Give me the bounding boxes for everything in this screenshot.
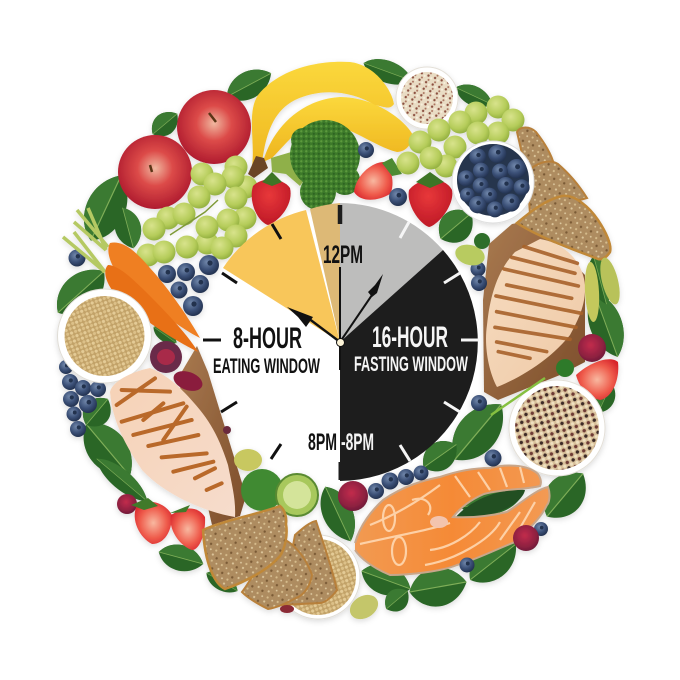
bananas — [248, 62, 413, 178]
strawberries top — [252, 158, 452, 227]
bread slices right — [517, 128, 610, 259]
grain bowl bottom — [276, 535, 360, 619]
label: 12PM: 12PM — [323, 241, 363, 269]
parsley and cucumber — [223, 426, 318, 516]
bread slices bottom — [203, 506, 337, 609]
subheading: fasting window: FASTING WINDOW — [354, 353, 468, 376]
tricolor quinoa bowl — [491, 378, 605, 476]
noon and lower axis lines — [339, 267, 341, 370]
heading: 8-hour: 8-HOUR — [233, 322, 302, 355]
grain bowl left — [58, 289, 152, 383]
grey fasting sector — [340, 203, 443, 342]
cutting board left — [178, 346, 246, 525]
small berries and pickle bottom — [280, 590, 382, 624]
cherry and strawberry right — [576, 334, 618, 400]
tan sector before noon — [310, 203, 340, 342]
green grapes left — [136, 156, 258, 266]
minute hand — [340, 274, 383, 342]
blueberry bowl — [452, 141, 534, 223]
food ring — [46, 53, 633, 624]
heading: 16-hour: 16-HOUR — [372, 321, 448, 354]
quinoa bowl top — [396, 67, 458, 129]
green grapes right — [396, 96, 524, 178]
eating window gold sector — [223, 210, 340, 342]
lime wedge and parsley right — [453, 233, 574, 377]
tick marks — [203, 205, 479, 480]
cutting board right — [483, 220, 585, 400]
clock face — [203, 203, 479, 481]
okra pickles right — [583, 256, 624, 322]
hour hand — [287, 307, 340, 342]
carrots — [63, 208, 200, 352]
spinach leaves — [46, 53, 633, 617]
salmon steak — [355, 466, 550, 575]
label: 8PM: 8PM — [308, 429, 337, 456]
dark fasting sector — [340, 250, 478, 481]
blueberries and cherries around the ring — [59, 142, 548, 618]
broccoli — [271, 120, 360, 210]
subheading: eating window: EATING WINDOW — [213, 355, 320, 378]
apples — [118, 90, 251, 209]
strawberries bottom left — [131, 498, 205, 550]
grilled chicken left — [110, 368, 235, 517]
cherry half and kidney bean — [150, 341, 205, 395]
grilled chicken right — [486, 239, 585, 387]
label: -8PM: -8PM — [341, 429, 374, 456]
center pin — [336, 338, 344, 346]
